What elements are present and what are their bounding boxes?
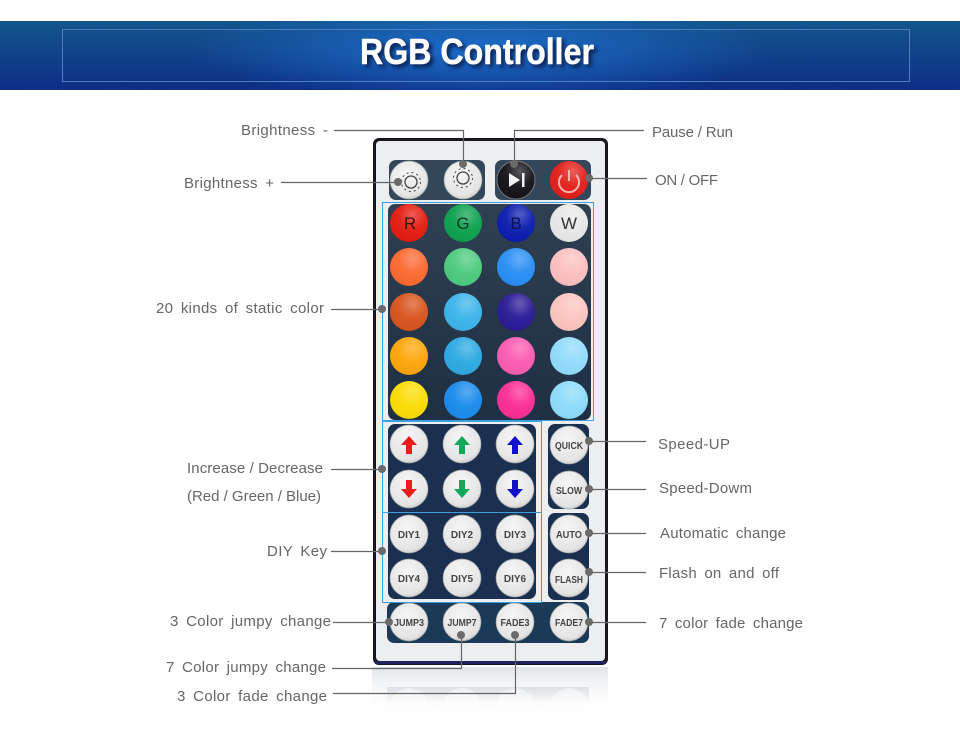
panel: brightness keys (389, 160, 485, 200)
DIY buttons: DIY3 (504, 530, 527, 541)
blue highlight frames (382, 202, 594, 602)
label: ON / OFF (585, 172, 718, 189)
DIY buttons: DIY2 (451, 530, 474, 541)
label: Brightness minus (241, 122, 467, 168)
speed and mode buttons: QUICK (555, 441, 584, 452)
remote control body (373, 138, 608, 665)
button: pause run (497, 161, 535, 199)
label: Speed-UP (585, 436, 730, 453)
label: 7 Color jumpy change (166, 631, 465, 676)
label: Increase / Decrease (Red / Green / Blue) (187, 460, 386, 505)
button: power (550, 161, 588, 199)
speed and mode buttons: AUTO (556, 530, 582, 541)
label: Brightness plus: Brightness + (184, 175, 274, 192)
label: DIY Key (267, 543, 386, 560)
DIY buttons: DIY6 (504, 574, 527, 585)
speed and mode buttons: FLASH (555, 575, 583, 586)
label: Speed-Dowm: Speed-Dowm (659, 480, 752, 497)
DIY buttons (390, 515, 534, 597)
label: Automatic change: Automatic change (660, 525, 786, 542)
label: Increase / Decrease (Red / Green / Blue): (Red / Green / Blue) (187, 488, 321, 505)
label: 7 color fade change: 7 color fade change (659, 615, 803, 632)
label: Pause / Run (510, 124, 733, 168)
speed and mode buttons (550, 426, 588, 597)
label: Brightness minus: Brightness - (241, 122, 328, 139)
jump and fade buttons (390, 603, 588, 641)
color buttons: B (510, 214, 522, 233)
label: Brightness plus (184, 175, 402, 192)
jump and fade buttons: FADE7 (555, 618, 583, 629)
panel: arrow and DIY keys (388, 424, 536, 599)
label: 7 color fade change (585, 615, 803, 632)
arrow buttons (390, 425, 534, 508)
DIY buttons: DIY5 (451, 574, 474, 585)
label: 20 kinds of static color: 20 kinds of static color (156, 300, 324, 317)
DIY buttons: DIY4 (398, 574, 421, 585)
label: Flash on and off (585, 565, 780, 582)
jump and fade buttons: FADE3 (500, 618, 530, 629)
panel: jump and fade keys (387, 602, 589, 643)
label: Flash on and off: Flash on and off (659, 565, 780, 582)
jump and fade buttons: JUMP7 (448, 618, 477, 629)
remote reflection (372, 667, 608, 726)
label: 3 Color fade change (177, 631, 519, 705)
color buttons: W (561, 214, 577, 233)
panel: color keys (388, 204, 591, 420)
title banner (0, 0, 960, 104)
label: ON / OFF: ON / OFF (655, 172, 718, 189)
label: 3 Color fade change: 3 Color fade change (177, 688, 327, 705)
label: 7 Color jumpy change: 7 Color jumpy change (166, 659, 326, 676)
color buttons: G (456, 214, 470, 233)
label: Speed-UP: Speed-UP (658, 436, 730, 453)
title: RGB Controller (360, 31, 594, 72)
panel: speed keys (548, 424, 589, 509)
label: Speed-Dowm (585, 480, 752, 497)
speed and mode buttons: SLOW (556, 486, 582, 497)
color buttons (390, 204, 588, 419)
button: brightness minus (444, 161, 482, 199)
DIY buttons: DIY1 (398, 530, 421, 541)
label: DIY Key: DIY Key (267, 543, 328, 560)
label: 3 Color jumpy change: 3 Color jumpy change (170, 613, 331, 630)
panel: auto and flash keys (548, 513, 589, 600)
button: brightness plus (390, 161, 428, 199)
jump and fade buttons: JUMP3 (394, 618, 424, 629)
label: Pause / Run: Pause / Run (652, 124, 733, 141)
label: Increase / Decrease (Red / Green / Blue): Increase / Decrease (187, 460, 323, 477)
label: Automatic change (585, 525, 786, 542)
color buttons: R (404, 214, 416, 233)
panel: power keys (495, 160, 591, 200)
